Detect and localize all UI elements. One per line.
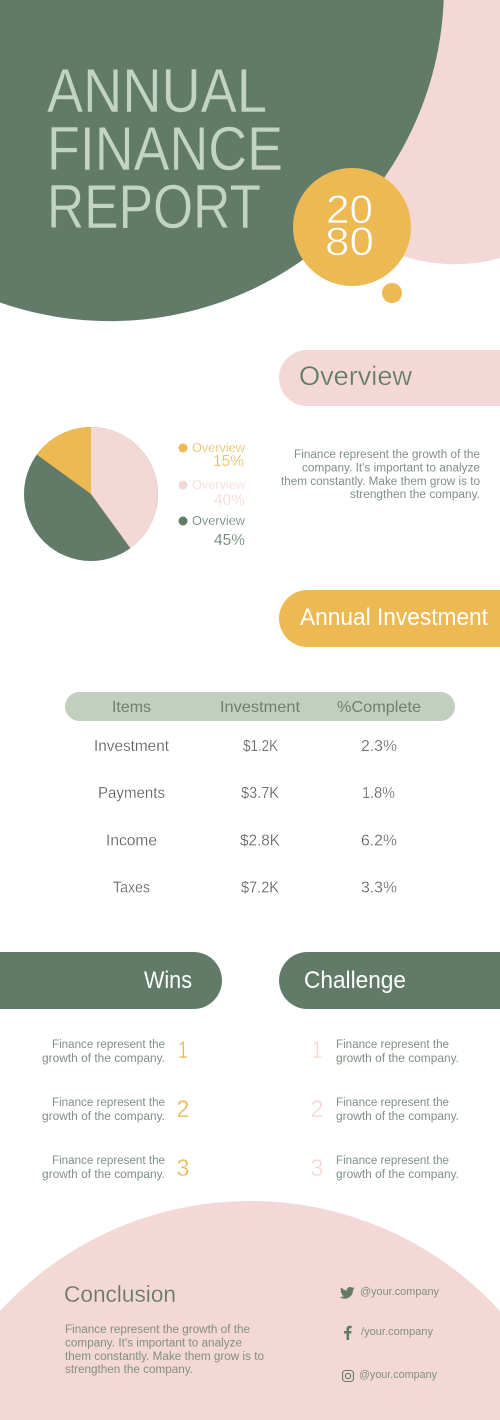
- challenge 3: growth of the company.: [336, 1169, 459, 1181]
- row: investment: [94, 738, 397, 755]
- row: payments: [98, 785, 395, 802]
- table rows: [94, 738, 397, 896]
- title: ANNUAL: [47, 57, 267, 126]
- year badge: [293, 168, 411, 286]
- challenge 2: 2: [310, 1096, 324, 1123]
- annual investment heading pill: [279, 590, 500, 647]
- win 3: [42, 1155, 190, 1182]
- row: taxes: 3.3%: [361, 880, 397, 896]
- legend item: 45%: [178, 513, 246, 549]
- win 2: 2: [176, 1096, 190, 1123]
- overview paragraph: strengthen the company.: [350, 489, 480, 501]
- pink footer blob: [0, 1201, 500, 1420]
- legend item: 45%: Overview: [192, 513, 246, 528]
- row: payments: Payments: [98, 785, 165, 802]
- overview paragraph: them constantly. Make them grow is to: [281, 476, 480, 488]
- icon: twitter: [340, 1287, 354, 1299]
- challenge list: [310, 1037, 459, 1182]
- social: instagram: @your.company: [359, 1369, 437, 1381]
- title: [47, 57, 283, 242]
- legend item: 15%: 15%: [213, 453, 244, 470]
- challenge 3: 3: [310, 1155, 324, 1182]
- table header: %Complete: [337, 699, 421, 716]
- conclusion paragraph: them constantly. Make them grow is to: [65, 1351, 264, 1363]
- legend item: 45%: 45%: [214, 532, 245, 549]
- row: investment: $1.2K: [243, 738, 278, 755]
- conclusion paragraph: Finance represent the growth of the: [65, 1324, 250, 1336]
- win 1: Finance represent the: [52, 1039, 165, 1051]
- challenge 3: Finance represent the: [336, 1155, 449, 1167]
- annual investment heading pill: Annual Investment: [300, 604, 488, 631]
- green background blob: [0, 0, 444, 321]
- overview paragraph: [281, 449, 480, 501]
- win 1: growth of the company.: [42, 1053, 165, 1065]
- legend item: 15%: [178, 440, 246, 470]
- overview heading pill: Overview: [299, 361, 412, 391]
- overview paragraph: company. It's important to analyze: [302, 462, 480, 474]
- row: payments: $3.7K: [241, 785, 279, 802]
- year badge: 20: [326, 188, 373, 232]
- conclusion paragraph: strengthen the company.: [65, 1364, 193, 1376]
- wins heading pill: Wins: [144, 967, 192, 994]
- challenge 2: Finance represent the: [336, 1097, 449, 1109]
- table header: Investment: [220, 699, 301, 716]
- legend item: 15%: Overview: [192, 440, 246, 455]
- challenge 2: growth of the company.: [336, 1111, 459, 1123]
- row: investment: Investment: [94, 738, 170, 755]
- conclusion paragraph: [65, 1324, 264, 1376]
- challenge 1: Finance represent the: [336, 1039, 449, 1051]
- conclusion heading: Conclusion: [64, 1281, 176, 1307]
- legend item: 40%: 40%: [214, 492, 245, 509]
- row: payments: 1.8%: [362, 785, 395, 802]
- row: income: [106, 832, 397, 850]
- win 3: Finance represent the: [52, 1155, 165, 1167]
- conclusion panel: [0, 1201, 500, 1420]
- row: income: Income: [106, 832, 157, 850]
- win 1: 1: [178, 1037, 188, 1064]
- small yellow dot: [382, 283, 402, 303]
- win 2: growth of the company.: [42, 1111, 165, 1123]
- table header: [65, 692, 455, 721]
- win 3: 3: [176, 1155, 190, 1182]
- row: taxes: Taxes: [113, 880, 150, 896]
- overview paragraph: Finance represent the growth of the: [294, 449, 480, 461]
- row: taxes: $7.2K: [241, 880, 279, 896]
- row: taxes: [113, 880, 397, 896]
- header: blobs and title: [0, 0, 500, 321]
- challenge 1: growth of the company.: [336, 1053, 459, 1065]
- social: facebook: [344, 1326, 433, 1340]
- icon: instagram: [342, 1370, 354, 1382]
- challenge 1: [312, 1037, 459, 1065]
- row: investment: 2.3%: [361, 738, 397, 755]
- pie legend: [178, 440, 246, 549]
- table header: Items: [112, 699, 151, 716]
- challenge heading pill: Challenge: [304, 967, 406, 994]
- row: income: 6.2%: [361, 832, 397, 850]
- conclusion paragraph: company. It's important to analyze: [65, 1338, 242, 1350]
- challenge heading pill: [279, 952, 500, 1009]
- year badge: 80: [325, 220, 374, 264]
- challenge 3: [310, 1155, 459, 1182]
- title: REPORT: [47, 173, 261, 242]
- wins heading pill: [0, 952, 222, 1009]
- win 1: [42, 1037, 188, 1065]
- win 3: growth of the company.: [42, 1169, 165, 1181]
- legend item: 40%: [178, 477, 246, 509]
- icon: facebook: [344, 1326, 352, 1340]
- win 2: [42, 1096, 190, 1123]
- overview heading pill: [279, 350, 500, 406]
- pink background blob: [286, 0, 500, 264]
- social: facebook: /your.company: [361, 1326, 433, 1338]
- legend item: 40%: Overview: [192, 477, 246, 492]
- win 2: Finance represent the: [52, 1097, 165, 1109]
- challenge 1: 1: [312, 1037, 322, 1064]
- row: income: $2.8K: [240, 832, 280, 850]
- title: FINANCE: [47, 115, 283, 184]
- wins list: [42, 1037, 190, 1182]
- social: twitter: @your.company: [360, 1286, 439, 1298]
- challenge 2: [310, 1096, 459, 1123]
- investment table: [65, 692, 455, 896]
- pie chart: [24, 427, 158, 561]
